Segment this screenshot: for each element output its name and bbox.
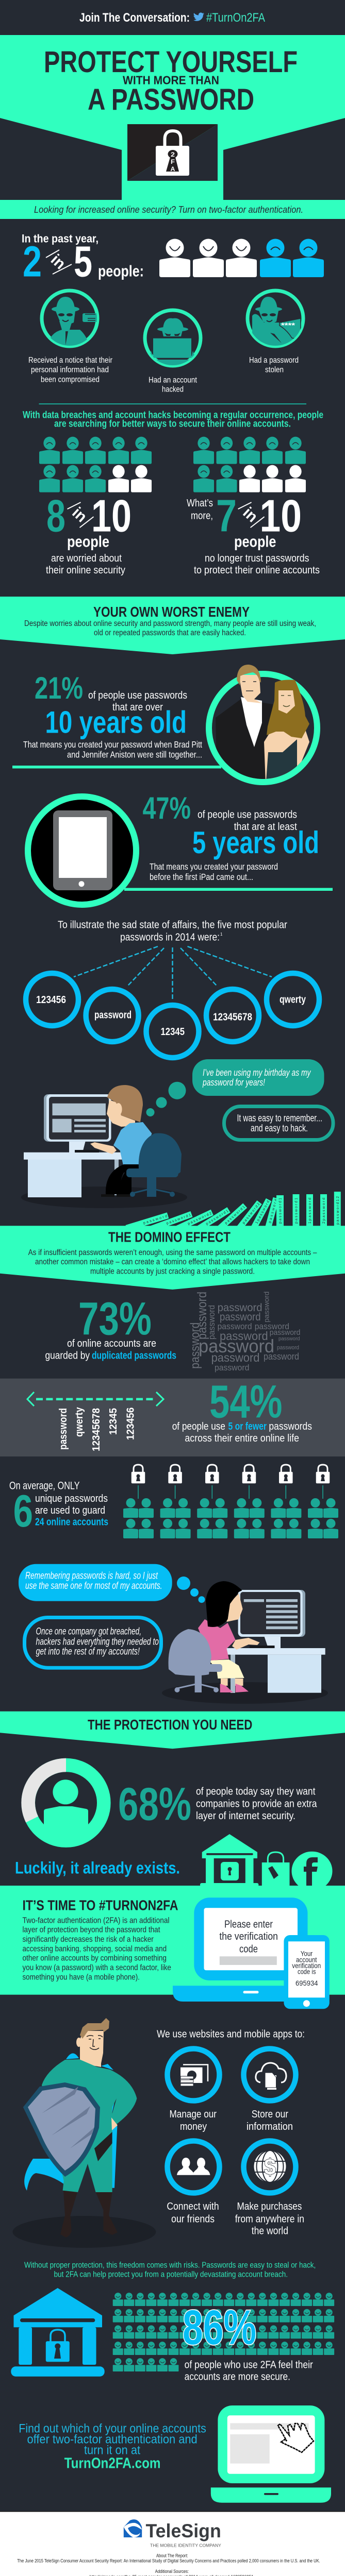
list: rotated passwords bbox=[58, 1407, 136, 1451]
pictogram: 86 of 100 people bbox=[113, 2293, 334, 2371]
panel: 54% five or fewer passwords: 5 or fewer bbox=[228, 1421, 267, 1432]
sources and copyright bbox=[17, 2553, 320, 2576]
stat: 73% duplicated passwords: 73% bbox=[78, 1294, 152, 1345]
hacker circle: compromised notice bbox=[42, 291, 99, 349]
illustration: tablet in circle bbox=[28, 796, 136, 905]
stat: 47% over 5 years old: 47% bbox=[142, 791, 191, 825]
tagline: Looking for increased online security? Turn on two-factor authentication. bbox=[34, 205, 303, 215]
stat: 7 in 10: people bbox=[234, 533, 276, 551]
illustration: falling password dominoes: password1 bbox=[205, 1209, 229, 1226]
stat: 21% over 10 years old: of people use passwords bbox=[88, 690, 187, 701]
callout: company breached: Once one company got breached, bbox=[36, 1626, 141, 1637]
illustration: laptop and phone with verification code: code bbox=[239, 1943, 258, 1955]
text: five most popular passwords: 1 bbox=[220, 932, 223, 937]
illustration: falling password dominoes: password1 bbox=[224, 1205, 246, 1225]
word cloud: password: password bbox=[278, 1336, 300, 1342]
heading: we use websites and apps: We use websites and mobile apps to: bbox=[157, 2028, 305, 2040]
stat: 7 in 10: no longer trust passwords bbox=[205, 553, 309, 564]
panel: 2 in 5 people: people: bbox=[98, 262, 144, 280]
heading: THE DOMINO EFFECT bbox=[108, 1229, 231, 1245]
title: WITH MORE THAN bbox=[123, 73, 219, 87]
illustration: superhero with shield bbox=[12, 2018, 156, 2248]
label: manage our money: Manage our bbox=[169, 2109, 217, 2120]
callout: easy to hack bbox=[224, 1107, 333, 1140]
chart: password circles with dashed connectors: qwerty bbox=[280, 994, 306, 1006]
icon row: five people bbox=[159, 239, 324, 277]
word cloud: password: password bbox=[264, 1351, 299, 1362]
label: store our information: information bbox=[247, 2121, 293, 2132]
icon: shopping bag bbox=[262, 1852, 290, 1887]
illustration: laptop and phone with verification code: verification bbox=[292, 1961, 321, 1970]
title: A PASSWORD bbox=[88, 83, 254, 116]
explainer text: Two-factor authentication (2FA) is an additional bbox=[23, 1916, 169, 1925]
stat: 7 in 10: 7 bbox=[216, 490, 237, 541]
icon: bank with lock bbox=[200, 1834, 258, 1887]
stat: 8 in 10: 10 bbox=[91, 490, 132, 541]
stat: 47% over 5 years old: before the first iPad came out... bbox=[150, 872, 253, 882]
caption: account hacked bbox=[149, 376, 198, 394]
stat: 7 in 10: to protect their online accounts bbox=[194, 565, 320, 576]
call to action: offer two-factor authentication and bbox=[27, 2432, 198, 2446]
stat: 7 in 10: What’s bbox=[187, 498, 213, 509]
stat: 73% duplicated passwords: guarded by bbox=[45, 1350, 90, 1362]
section banner: the protection you need: THE PROTECTION YOU NEED bbox=[88, 1717, 252, 1733]
icon: monitor with 2FA lock: F bbox=[171, 158, 175, 165]
footer bbox=[0, 2511, 345, 2576]
header: join the conversation: #TurnOn2FA bbox=[206, 11, 266, 25]
arrow: double-headed dashed bbox=[27, 1392, 163, 1406]
thought bubble: same password: Remembering passwords is hard, so I just bbox=[25, 1570, 158, 1581]
stat: 7 in 10 bbox=[187, 490, 320, 576]
stat: 6 unique passwords: are used to guard bbox=[35, 1505, 105, 1516]
hacker circle: account hacked bbox=[143, 308, 202, 368]
illustration: falling password dominoes: password2 bbox=[242, 1202, 261, 1225]
pictogram: 8 in 10 bbox=[39, 437, 152, 493]
icon: store information in cloud bbox=[243, 2048, 296, 2101]
illustration: falling password dominoes: 1password bbox=[308, 1198, 312, 1224]
heading: YOUR OWN WORST ENEMY bbox=[93, 604, 250, 620]
label: make purchases bbox=[235, 2201, 304, 2237]
panel: 54% five or fewer passwords: across their entire online life bbox=[185, 1433, 299, 1444]
label: manage our money bbox=[169, 2109, 217, 2132]
explainer text: you know (a password) with a second factor, like bbox=[23, 1963, 171, 1972]
intro text bbox=[24, 619, 316, 637]
stat: 6 unique passwords: unique passwords bbox=[35, 1493, 108, 1504]
stat: 73% duplicated passwords bbox=[45, 1294, 176, 1362]
stat: 73% duplicated passwords: of online accounts are bbox=[67, 1338, 156, 1349]
list: rotated passwords: 123456 bbox=[125, 1408, 136, 1440]
heading: IT’S TIME TO #TURNON2FA bbox=[23, 1897, 178, 1913]
stat: 6 unique passwords: 6 bbox=[13, 1485, 33, 1536]
illustration: Brad and Jennifer in circle bbox=[209, 665, 317, 788]
stat: 47% over 5 years old: of people use passwords bbox=[198, 809, 297, 821]
illustration: falling password dominoes: password1 bbox=[295, 1198, 298, 1224]
stat: 68% want extra security: companies to provide an extra bbox=[196, 1798, 317, 1809]
illustration: falling password dominoes: password bbox=[143, 1214, 168, 1225]
icon: global purchases: $ bbox=[264, 2155, 276, 2180]
illustration: laptop and phone with verification code: Please enter bbox=[224, 1919, 273, 1930]
word cloud: password bbox=[188, 1292, 300, 1372]
logo: TeleSign: TeleSign bbox=[145, 2520, 221, 2541]
label: store our information bbox=[247, 2109, 293, 2132]
illustration: falling password dominoes: 1password bbox=[255, 1200, 270, 1225]
panel: 54% five or fewer passwords: of people use bbox=[172, 1421, 225, 1432]
callout: better ways: are searching for better ways to secure their online accounts. bbox=[54, 419, 291, 430]
stat: 86% feel more secure: accounts are more secure. bbox=[185, 2371, 290, 2382]
illustration: laptop and phone with verification code: Your bbox=[301, 1950, 313, 1958]
dark backdrop shape bbox=[0, 118, 345, 200]
call to action: Find out which of your online accounts bbox=[19, 2422, 206, 2436]
caption: compromised notice: Received a notice that their bbox=[28, 356, 112, 365]
word cloud: password: password bbox=[211, 1351, 260, 1364]
callout: freedom comes with risks: but 2FA can help protect you from a potentially devastating account breach. bbox=[54, 2270, 288, 2279]
stat: 47% over 5 years old: That means you created your password bbox=[150, 861, 278, 872]
intro text bbox=[28, 1248, 317, 1276]
caption: account hacked: Had an account bbox=[149, 376, 198, 385]
stat: 21% over 10 years old: That means you created your password when Brad Pitt bbox=[23, 739, 202, 750]
list: rotated passwords: qwerty bbox=[74, 1407, 85, 1437]
word cloud: password: password bbox=[270, 1328, 300, 1337]
panel: 54% five or fewer passwords: passwords bbox=[269, 1421, 312, 1432]
illustration: laptop and phone with verification code: the verification bbox=[219, 1931, 278, 1942]
illustration: laptop and phone with verification code bbox=[173, 1897, 330, 2009]
in badge: in bbox=[69, 504, 90, 526]
stat: 68% want extra security: 68% bbox=[118, 1778, 191, 1830]
label: manage our money: money bbox=[180, 2121, 207, 2132]
word cloud: password: password bbox=[195, 1292, 209, 1340]
stat: 21% over 10 years old: and Jennifer Aniston were still together... bbox=[67, 750, 202, 760]
label: make purchases: from anywhere in bbox=[235, 2213, 304, 2225]
intro text: old or repeated passwords that are easily hacked. bbox=[94, 629, 246, 637]
stat: 6 unique passwords bbox=[9, 1480, 108, 1536]
text: five most popular passwords: passwords in 2014 were: bbox=[120, 932, 220, 943]
heading: luckily it already exists: Luckily, it already exists. bbox=[15, 1859, 180, 1877]
panel: 2 in 5 people: 5 bbox=[74, 238, 92, 286]
title bbox=[44, 45, 298, 116]
illustration: laptop and phone with verification code: account bbox=[296, 1955, 317, 1963]
callout: better ways bbox=[23, 410, 323, 430]
callout: company breached: get into the rest of my accounts! bbox=[36, 1647, 140, 1657]
sources and copyright: About The Report: bbox=[156, 2553, 188, 2558]
illustration: falling password dominoes: password12 bbox=[336, 1196, 340, 1225]
intro text: another common mistake – can create a ‘domino effect’ that allows hackers to take down bbox=[35, 1258, 310, 1266]
panel: 2 in 5 people: 2 bbox=[23, 238, 42, 286]
explainer text: significantly decreases the risk of a hacker bbox=[23, 1935, 154, 1944]
chart: password circles with dashed connectors: password bbox=[94, 1010, 132, 1021]
label: make purchases: the world bbox=[252, 2226, 288, 2237]
stat: 68% want extra security: of people today say they want bbox=[196, 1786, 316, 1797]
label: connect with our friends: our friends bbox=[171, 2213, 215, 2225]
illustration: woman at desk bbox=[162, 1581, 328, 1704]
section banner: the domino effect bbox=[0, 1226, 345, 1290]
thought bubble: birthday password: I’ve been using my birthday as my bbox=[203, 1067, 311, 1078]
explainer text: something you have (a mobile phone). bbox=[23, 1973, 140, 1981]
illustration: falling password dominoes: password2 bbox=[187, 1212, 212, 1226]
chart: password circles with dashed connectors: 12345 bbox=[161, 1026, 185, 1038]
stat: 21% over 10 years old: that are over bbox=[112, 702, 163, 713]
stat: 7 in 10: more, bbox=[191, 511, 213, 522]
word cloud: password: password bbox=[218, 1302, 262, 1314]
logo: TeleSign: THE MOBILE IDENTITY COMPANY bbox=[150, 2543, 221, 2548]
word cloud: password: password bbox=[207, 1305, 217, 1340]
label: make purchases: Make purchases bbox=[237, 2201, 302, 2212]
stat: 86% feel more secure: 86% bbox=[183, 2300, 256, 2355]
icon: blue bank with lock bbox=[11, 2288, 105, 2377]
stat: 8 in 10: their online security bbox=[46, 565, 125, 576]
thought bubble: same password: use the same one for most of my accounts. bbox=[25, 1581, 162, 1591]
caption: compromised notice: been compromised bbox=[41, 376, 100, 384]
word cloud: password: password bbox=[220, 1311, 261, 1323]
icon: connect with friends bbox=[167, 2141, 220, 2193]
call to action bbox=[19, 2422, 206, 2472]
caption: compromised notice bbox=[28, 356, 112, 384]
illustration: falling password dominoes: password1 bbox=[278, 1198, 283, 1224]
illustration: falling password dominoes: password bbox=[268, 1199, 278, 1224]
icon: manage money bbox=[167, 2048, 220, 2101]
word cloud: password: password bbox=[277, 1345, 299, 1351]
illustration: laptop and phone with verification code: 695934 bbox=[295, 1979, 318, 1987]
caption: password stolen: Had a password bbox=[249, 356, 299, 365]
callout: freedom comes with risks bbox=[24, 2261, 316, 2279]
explainer text bbox=[23, 1916, 171, 1981]
word cloud: password: password bbox=[199, 1335, 274, 1357]
panel: it's time to turn on 2FA bbox=[0, 1886, 345, 1995]
icon: global purchases bbox=[243, 2141, 296, 2193]
word cloud: password: password bbox=[262, 1292, 270, 1323]
header: join the conversation: Join The Conversation: bbox=[79, 11, 190, 25]
stat: 21% over 10 years old: 21% bbox=[35, 671, 83, 705]
panel: 54% five or fewer passwords bbox=[0, 1377, 345, 1456]
callout: easy to hack: and easy to hack. bbox=[251, 1123, 308, 1134]
caption: password stolen: stolen bbox=[265, 366, 284, 375]
call to action: turn it on at bbox=[84, 2443, 140, 2457]
illustration: man at desk bbox=[21, 1085, 187, 1208]
stat: 8 in 10: people bbox=[67, 533, 109, 551]
icon: monitor with 2FA lock: A bbox=[170, 165, 175, 173]
icon: facebook circle bbox=[292, 1852, 332, 1891]
section banner: your own worst enemy bbox=[0, 597, 345, 654]
panel: hero title with monitor bbox=[0, 35, 345, 219]
list: rotated passwords: password bbox=[58, 1408, 69, 1450]
explainer text: layer of protection beyond the password that bbox=[23, 1926, 160, 1935]
icon: shield bbox=[23, 2082, 100, 2177]
icon: monitor with 2FA lock: 2 bbox=[171, 151, 175, 158]
stat: 73% duplicated passwords: duplicated passwords bbox=[92, 1350, 176, 1362]
icon: pointer hand bbox=[278, 2424, 314, 2452]
in badge: in bbox=[240, 504, 261, 526]
explainer text: other online accounts by combining something bbox=[23, 1954, 167, 1963]
stat: 86% feel more secure bbox=[183, 2300, 313, 2382]
word cloud: password: password bbox=[218, 1321, 252, 1331]
panel: 2 in 5 people: In the past year, bbox=[22, 232, 98, 245]
chart: password circles with dashed connectors bbox=[26, 946, 319, 1058]
illustration: falling password dominoes bbox=[125, 1192, 341, 1241]
list: rotated passwords: 12345 bbox=[108, 1408, 119, 1435]
thought bubble: birthday password bbox=[146, 1059, 324, 1116]
illustration: laptop with cursor bbox=[211, 2405, 331, 2503]
illustration: falling password dominoes: password1 bbox=[166, 1213, 191, 1226]
stat: 21% over 10 years old bbox=[23, 671, 202, 760]
thought bubble: same password bbox=[19, 1564, 205, 1603]
illustration: falling password dominoes: 2password bbox=[322, 1198, 326, 1224]
pictogram: 6 locks guarding 24 accounts bbox=[123, 1465, 338, 1538]
text: five most popular passwords bbox=[58, 920, 287, 943]
callout: company breached: hackers had everything they needed to bbox=[36, 1636, 159, 1647]
panel: 54% five or fewer passwords: 54% bbox=[209, 1377, 283, 1428]
label: store our information: Store our bbox=[252, 2109, 288, 2120]
illustration: laptop and phone with verification code: code is bbox=[298, 1968, 316, 1976]
chart: 68% donut with person bbox=[28, 1765, 104, 1850]
panel: 2 in 5 people bbox=[22, 232, 324, 286]
stat: 7 in 10: 10 bbox=[260, 490, 302, 541]
section banner: the protection you need bbox=[0, 1711, 345, 1749]
hacker circle: password stolen: **** bbox=[281, 321, 295, 329]
stat: 8 in 10: are worried about bbox=[51, 553, 122, 564]
icon: twitter bird bbox=[193, 13, 204, 21]
pictogram: 7 in 10 bbox=[193, 437, 306, 493]
text: five most popular passwords: To illustrate the sad state of affairs, the five most popular bbox=[58, 920, 287, 931]
in badge: in bbox=[47, 251, 69, 273]
icon: monitor with 2FA lock bbox=[122, 121, 223, 200]
label: connect with our friends bbox=[167, 2201, 219, 2225]
chart: password circles with dashed connectors: 12345678 bbox=[213, 1012, 252, 1023]
word cloud: password: password bbox=[188, 1323, 202, 1369]
stat: 8 in 10: 8 bbox=[46, 490, 65, 541]
intro text: multiple accounts by just cracking a single password. bbox=[90, 1267, 255, 1276]
list: rotated passwords: 12345678 bbox=[91, 1408, 102, 1451]
thought bubble: birthday password: password for years! bbox=[202, 1077, 265, 1088]
explainer text: accessing banking, shopping, social media and bbox=[23, 1944, 167, 1953]
caption: account hacked: hacked bbox=[162, 385, 184, 394]
callout: company breached bbox=[25, 1618, 161, 1668]
stat: 21% over 10 years old: 10 years old bbox=[45, 705, 187, 740]
logo: TeleSign bbox=[124, 2519, 221, 2548]
stat: 47% over 5 years old: that are at least bbox=[234, 821, 297, 833]
caption: password stolen bbox=[249, 356, 299, 375]
stat: 68% want extra security: layer of internet security. bbox=[196, 1810, 295, 1822]
word cloud: password: password bbox=[255, 1321, 289, 1331]
stat: 6 unique passwords: On average, ONLY bbox=[9, 1480, 79, 1492]
stat: 68% want extra security bbox=[118, 1778, 317, 1830]
stat: 47% over 5 years old bbox=[142, 791, 319, 882]
caption: compromised notice: personal information had bbox=[31, 366, 109, 375]
label: connect with our friends: Connect with bbox=[167, 2201, 219, 2212]
chart: password circles with dashed connectors: 123456 bbox=[36, 994, 66, 1006]
sources and copyright: Additional Sources: bbox=[155, 2569, 189, 2574]
stat: 86% feel more secure: of people who use 2FA feel their bbox=[185, 2360, 313, 2371]
stat: 8 in 10 bbox=[46, 490, 132, 576]
word cloud: password: password bbox=[220, 1329, 268, 1343]
word cloud: password: password bbox=[215, 1363, 249, 1372]
call to action: TurnOn2FA.com bbox=[64, 2455, 160, 2472]
stat: 6 unique passwords: 24 online accounts bbox=[35, 1517, 108, 1528]
hacker circle: password stolen bbox=[248, 291, 303, 349]
